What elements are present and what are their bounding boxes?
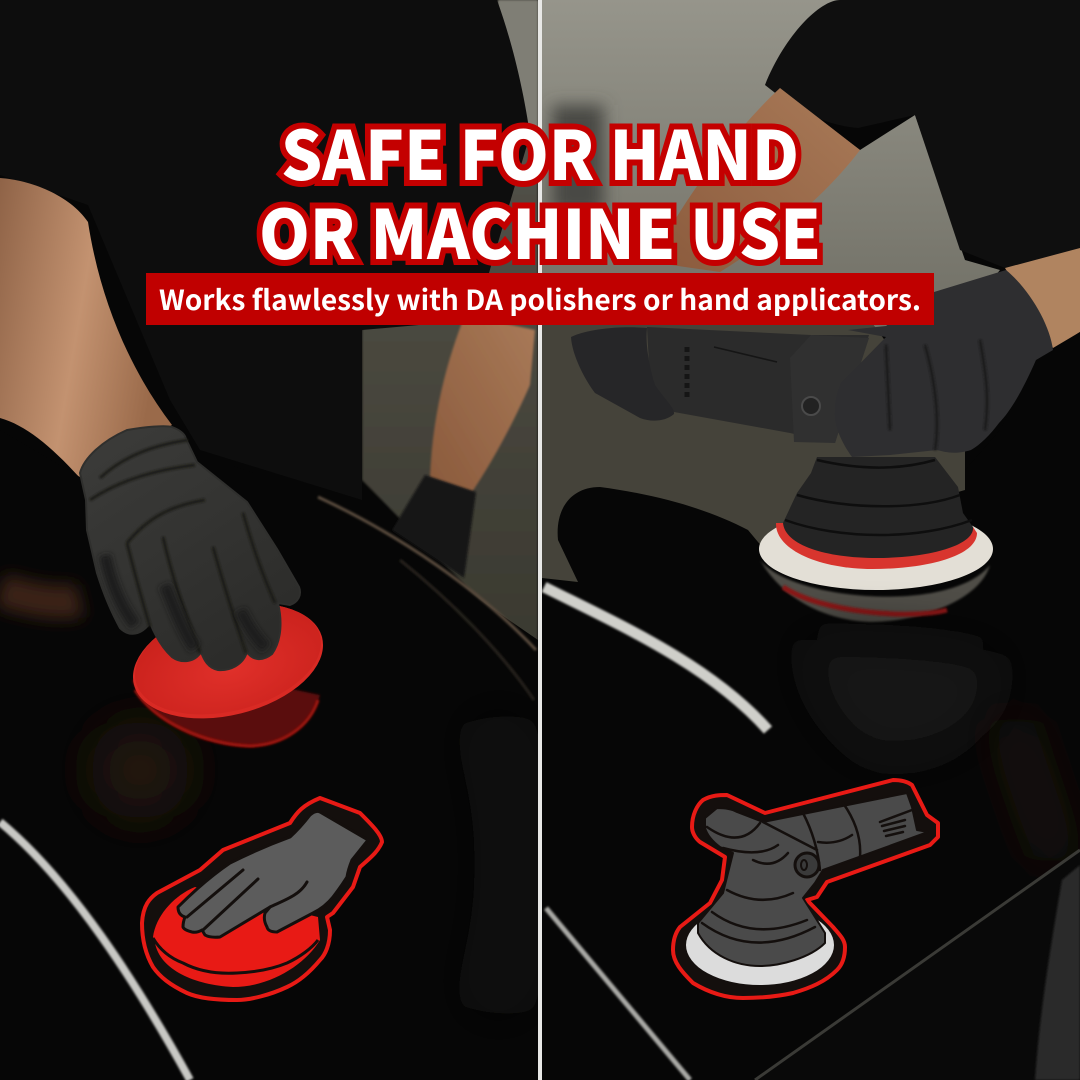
forearm: main arm bbox=[0, 178, 172, 478]
forearm: right arm bbox=[1005, 248, 1080, 348]
divider bbox=[538, 0, 542, 1080]
hood highlight upper bbox=[544, 587, 768, 730]
red applicator pad bbox=[133, 606, 323, 718]
background wall bbox=[542, 0, 1000, 330]
forearm: background arm bbox=[430, 315, 535, 492]
right glove bbox=[835, 270, 1053, 457]
icon: dual-action polisher bbox=[673, 780, 938, 998]
hood highlight line bbox=[0, 822, 190, 1080]
car reflection blobs bbox=[826, 604, 977, 740]
subtitle banner: Works flawlessly with DA polishers or hand applicators. bbox=[159, 279, 921, 319]
car hood bbox=[78, 476, 538, 650]
title: OR MACHINE USE bbox=[259, 180, 821, 279]
glove: background hand bbox=[392, 475, 476, 578]
title bbox=[259, 101, 821, 279]
car edge bbox=[755, 850, 1080, 1080]
technician shirt bbox=[361, 0, 528, 480]
panel: machine polisher photo bbox=[542, 0, 1080, 1080]
panel: hand application photo bbox=[0, 0, 538, 1080]
left glove bbox=[571, 327, 674, 421]
hood highlight lower bbox=[546, 908, 690, 1080]
white foam pad bbox=[759, 523, 993, 590]
polisher body bbox=[647, 327, 973, 558]
polisher reflection bbox=[760, 560, 990, 622]
clothing area behind polisher bbox=[542, 320, 965, 582]
black glove on pad bbox=[80, 426, 300, 670]
technician shirt bbox=[765, 0, 1080, 268]
icon: gloved hand on red pad bbox=[142, 798, 382, 1000]
red pad reflection bbox=[132, 680, 320, 747]
dark shape on wall bbox=[552, 105, 604, 215]
forearm: left arm bbox=[672, 88, 860, 272]
dark area under right arm bbox=[1074, 332, 1080, 336]
background wall bbox=[362, 0, 538, 650]
title: SAFE FOR HAND bbox=[281, 101, 799, 200]
